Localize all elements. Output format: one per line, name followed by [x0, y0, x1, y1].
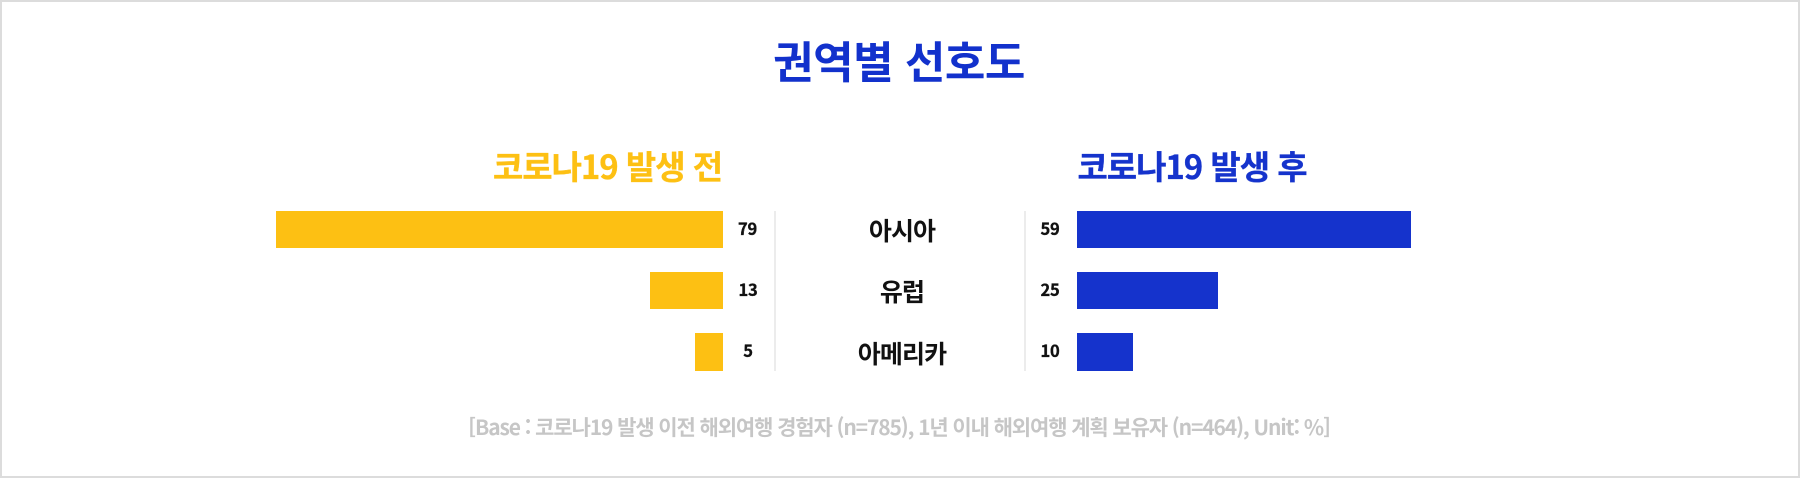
heading: after COVID-19: 코로나19 발생 후	[1077, 141, 1307, 189]
right divider	[1024, 211, 1026, 371]
panel: after COVID-19	[1040, 141, 1411, 371]
value: 5: 5	[743, 338, 753, 362]
value: 59: 59	[1040, 216, 1060, 240]
left divider	[774, 211, 776, 371]
bar: America 5	[695, 333, 723, 371]
label: Europe: 유럽	[880, 273, 924, 309]
value: 10: 10	[1040, 338, 1060, 362]
panel: region labels	[858, 212, 946, 371]
label: America: 아메리카	[858, 335, 946, 371]
footnote: [Base : 코로나19 발생 이전 해외여행 경험자 (n=785), 1년 이내 해외여행 계획 보유자 (n=464), Unit: %]	[468, 412, 1330, 442]
heading: before COVID-19: 코로나19 발생 전	[493, 141, 722, 189]
bar: America 10	[1077, 333, 1133, 371]
bar: Asia 79	[276, 211, 723, 248]
value: 79: 79	[738, 216, 757, 240]
bar: Europe 25	[1077, 272, 1218, 309]
bar: Europe 13	[650, 272, 723, 309]
bar: Asia 59	[1077, 211, 1411, 248]
panel: before COVID-19	[276, 141, 758, 371]
value: 25: 25	[1040, 277, 1060, 301]
label: Asia: 아시아	[869, 212, 935, 248]
value: 13: 13	[738, 277, 758, 301]
title: 권역별 선호도	[773, 27, 1025, 91]
